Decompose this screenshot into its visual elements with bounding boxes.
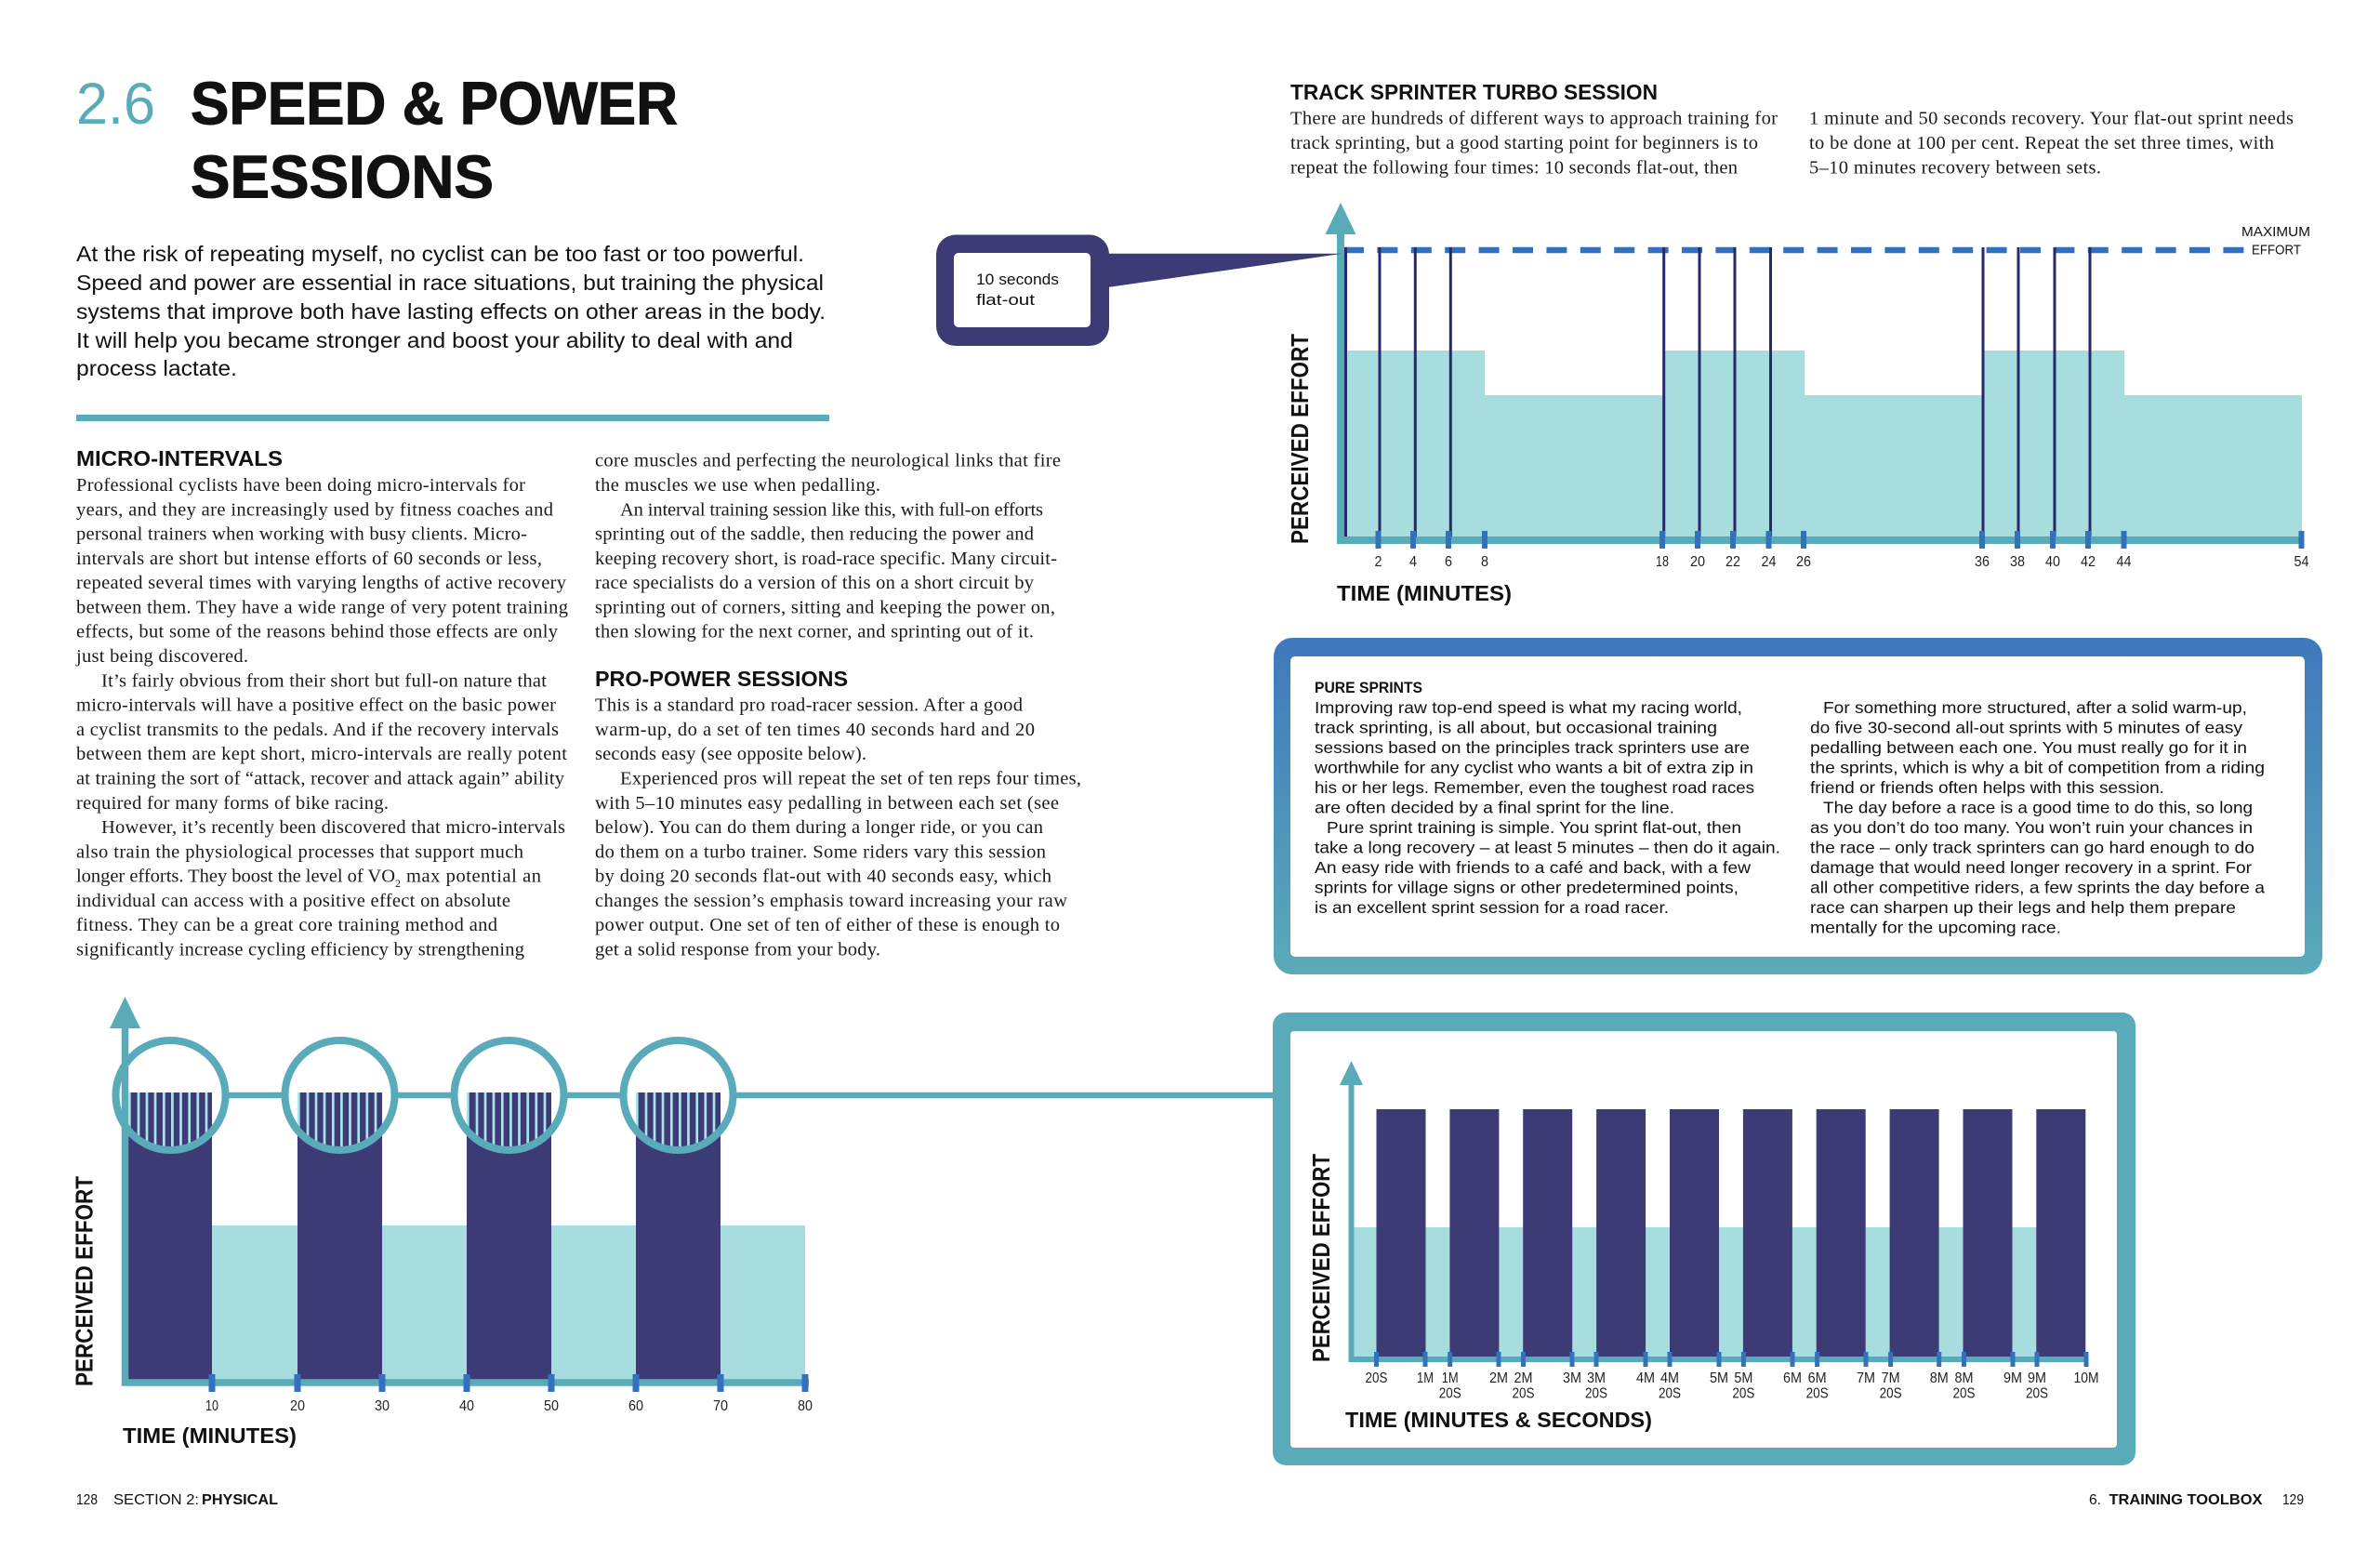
body copy: pro-power sessions: seconds easy (see opposite below). [595,744,866,764]
x axis title: TIME (MINUTES) [1337,581,1512,605]
body copy: track sprinter: repeat the following four times: 10 seconds flat-out, then [1290,158,1738,179]
text column: continued and pro-power sessions [595,451,1081,960]
body copy: micro-intervals: between them are kept short, micro-intervals are really potent [76,744,567,764]
x axis labels: 1M [1417,1370,1434,1386]
body copy: pro-power sessions: warm-up, do a set of ten times 40 seconds hard and 20 [595,720,1035,740]
body copy: micro-intervals: micro-intervals will have a positive effect on the basic power [76,695,556,716]
panel frame [1273,1013,2135,1465]
x axis labels: 9M [2028,1370,2046,1386]
body copy: micro-intervals: longer efforts. They boost the level of VO [76,867,395,887]
x axis labels: 3M [1563,1370,1581,1386]
x axis ticks [1376,1352,2086,1367]
body copy: micro-intervals: individual can access with a positive effect on absolute [76,891,510,911]
body copy: pure sprints left: sprints for village signs or other predetermined points, [1315,878,1739,896]
recovery blocks [212,1225,805,1380]
panel interior [1290,656,2305,957]
intro rule [76,415,829,421]
x axis labels: 44 [2116,554,2132,570]
y axis label: PERCEIVED EFFORT [71,1176,99,1386]
body copy: micro-intervals continued: core muscles and perfecting the neurological links that fire [595,451,1061,471]
x axis labels [1374,554,2309,570]
body copy: pure sprints right: friend or friends often helps with this session. [1810,778,2164,797]
callout inner panel [954,253,1091,327]
body copy: pro-power sessions: with 5–10 minutes easy pedalling in between each set (see [595,793,1059,814]
body copy: micro-intervals [75,475,568,960]
intro paragraph: It will help you became stronger and boost your ability to deal with and [76,328,793,352]
x axis labels: 20S [1806,1385,1829,1402]
body copy: micro-intervals: personal trainers when working with busy clients. Micro- [76,524,527,545]
body copy: track sprinter [1290,108,2294,179]
body copy: micro-intervals: just being discovered. [75,646,248,667]
x axis labels: 8M [1930,1370,1949,1386]
callout box [936,234,1109,346]
intro paragraph: process lactate. [76,356,237,380]
x axis labels: 20S [1732,1385,1754,1402]
x axis labels: 4 [1409,554,1417,570]
x axis labels: 36 [1975,554,1990,570]
magnified circle 2 [284,1040,394,1153]
body copy: pure sprints right: pedalling between each one. You must really go for it in [1810,738,2247,757]
chart: track sprinter turbo session [1286,203,2310,605]
body copy: pure sprints left: his or her legs. Remember, even the toughest road races [1315,778,1754,797]
body copy: micro-intervals: significantly increase cycling efficiency by strengthening [76,939,524,960]
body copy: pro-power sessions: do them on a turbo trainer. Some riders vary this session [595,841,1046,862]
footer left [76,1492,278,1508]
x axis labels: 26 [1796,554,1811,570]
footer right: 6. [2089,1492,2101,1508]
body copy: track sprinter: 1 minute and 50 seconds recovery. Your flat-out sprint needs [1809,108,2294,128]
x axis labels: 3M [1587,1370,1606,1386]
body copy: track sprinter: track sprinting, but a good starting point for beginners is to [1290,133,1758,153]
callout text: flat-out [976,291,1035,309]
x axis labels: 20S [2026,1385,2048,1402]
x axis labels: 4M [1660,1370,1679,1386]
body copy: micro-intervals: intervals are short but intense efforts of 60 seconds or less, [76,549,542,569]
x axis labels: 8 [1481,554,1488,570]
y axis arrow [1340,1061,1363,1085]
maximum effort label: EFFORT [2252,244,2301,258]
x axis labels: 22 [1726,554,1740,570]
panel interior [1290,1031,2117,1448]
body copy: micro-intervals: between them. They have a wide range of very potent training [76,597,568,617]
x axis labels: 20 [290,1398,305,1414]
text column: micro-intervals [75,446,568,960]
panel frame [1274,638,2322,974]
body copy: micro-intervals: years, and they are increasingly used by fitness coaches and [76,499,553,520]
body copy: track sprinter: There are hundreds of different ways to approach training for [1290,108,1778,128]
x axis labels: 42 [2081,554,2096,570]
body copy: pure sprints left: worthwhile for any cyclist who wants a bit of extra zip in [1314,759,1753,777]
body copy: micro-intervals: It’s fairly obvious from their short but full-on nature that [101,670,547,691]
heading: micro-intervals: MICRO-INTERVALS [76,446,283,470]
x axis labels: 30 [375,1398,390,1414]
x axis labels: 38 [2010,554,2025,570]
callout: 10 seconds flat-out [936,234,1342,346]
body copy: micro-intervals continued: race specialists do a version of this on a short circuit by [595,573,1035,593]
body copy: pure sprints left: An easy ride with friends to a café and back, with a few [1315,858,1751,877]
maximum effort label: MAXIMUM [2241,225,2310,240]
intro paragraph: systems that improve both have lasting effects on other areas in the body. [76,299,826,324]
recovery band [1354,1227,2037,1357]
title line 1: SPEED & POWER [191,69,678,138]
section number: 2.6 [76,72,155,137]
magnified circle 3 [454,1040,563,1153]
panel: pro-power chart [1273,1013,2135,1465]
body copy: micro-intervals: However, it’s recently been discovered that micro-intervals [101,817,565,838]
x axis labels: 80 [798,1398,813,1414]
chart: micro-intervals effort over time [71,997,1276,1448]
body copy: micro-intervals continued: sprinting out of corners, sitting and keeping the power on, [595,597,1055,617]
body copy: pro-power sessions: changes the session’s emphasis toward increasing your raw [595,891,1067,911]
x axis labels: 2 [1374,554,1382,570]
body copy: pure sprints left: are often decided by a final sprint for the line. [1315,798,1674,816]
connector line to pro-power chart [229,1092,1276,1098]
intro paragraph [76,242,826,380]
axes [125,1027,809,1383]
x axis labels: 7M [1882,1370,1900,1386]
footer left: SECTION 2: [113,1492,199,1508]
body copy: pure sprints right: race can sharpen up their legs and help them prepare [1810,898,2236,917]
body copy: micro-intervals: effects, but some of the reasons behind those effects are only [76,622,559,642]
effort bars [1376,1109,2085,1357]
body copy: pro-power sessions [595,695,1081,960]
effort bars [128,1092,721,1380]
x axis labels: 6 [1445,554,1452,570]
maximum effort label [2241,225,2310,258]
x axis labels: 5M [1710,1370,1728,1386]
axes [1352,1083,2086,1359]
body copy: track sprinter: 5–10 minutes recovery between sets. [1809,158,2101,179]
callout text: 10 seconds [976,271,1059,288]
body copy: micro-intervals: required for many forms of bike racing. [76,793,389,814]
body copy: micro-intervals: a cyclist transmits to the pedals. And if the recovery intervals [76,720,559,740]
x axis labels: 20 [1690,554,1705,570]
body copy: pure sprints right: The day before a race is a good time to do this, so long [1823,798,2253,816]
body copy: pure sprints left: Improving raw top-end speed is what my racing world, [1315,698,1742,717]
body copy: pure sprints right: damage that would need longer recovery in a sprint. For [1810,858,2252,877]
footer right [2089,1492,2304,1508]
body copy: micro-intervals: also train the physiological processes that support much [76,841,523,862]
body copy: micro-intervals continued [595,451,1061,642]
x axis labels: 5M [1734,1370,1752,1386]
footer left: PHYSICAL [202,1492,278,1508]
footer right: TRAINING TOOLBOX [2109,1492,2263,1508]
magnified circle 4 [623,1040,733,1153]
body copy: micro-intervals: max potential an [406,867,541,887]
x axis labels: 20S [1880,1385,1902,1402]
body copy: micro-intervals: repeated several times with varying lengths of active recovery [76,573,567,593]
x axis labels: 7M [1857,1370,1875,1386]
body copy: micro-intervals continued: the muscles we use when pedalling. [595,475,880,496]
x axis labels: 20S [1952,1385,1975,1402]
x axis labels: 24 [1761,554,1777,570]
body copy: pure sprints right: the race – only track sprinters can go hard enough to do [1810,839,2254,857]
footer left: 128 [76,1492,98,1508]
body copy: track sprinter: to be done at 100 per cent. Repeat the set three times, with [1809,133,2274,153]
x axis labels: 70 [713,1398,728,1414]
y axis arrow [1326,203,1355,234]
body copy: pure sprints left: track sprinting, is all about, but occasional training [1315,718,1717,736]
body copy: pro-power sessions: below). You can do them during a longer ride, or you can [595,817,1043,838]
recovery blocks [1485,395,2302,536]
x axis labels: 20S [1659,1385,1681,1402]
body copy: micro-intervals: 2 [395,877,401,890]
x axis labels: 9M [2003,1370,2022,1386]
body copy: pure sprints left: take a long recovery – at least 5 minutes – then do it again. [1315,839,1780,857]
x axis labels: 1M [1442,1370,1459,1386]
x axis labels: 2M [1489,1370,1508,1386]
body copy: pure sprints left: Pure sprint training is simple. You sprint flat-out, then [1327,818,1741,837]
body copy: micro-intervals: at training the sort of “attack, recover and attack again” ability [76,768,565,788]
body copy: pure sprints right [1810,698,2265,937]
body copy: pure sprints right: the sprints, which is why a bit of competition from a riding [1810,759,2265,777]
footer right: 129 [2282,1492,2304,1508]
body copy: pure sprints left: is an excellent sprint session for a road racer. [1315,898,1669,917]
x axis labels: 10M [2073,1370,2099,1386]
sprint lines [1346,247,2090,536]
x axis labels: 6M [1808,1370,1827,1386]
title [76,69,678,210]
x axis labels: 60 [628,1398,643,1414]
text block: track sprinter turbo session [1290,80,2294,179]
x axis labels: 20S [1439,1385,1461,1402]
x axis labels: 18 [1656,554,1669,570]
x axis labels: 40 [459,1398,474,1414]
magnified circle 1 [115,1040,225,1153]
x axis labels: 54 [2294,554,2309,570]
body copy: pure sprints right: mentally for the upcoming race. [1810,919,2061,937]
body copy: pro-power sessions: This is a standard pro road-racer session. After a good [595,695,1023,716]
x axis ticks [1378,531,2302,549]
body copy: pro-power sessions: Experienced pros will repeat the set of ten reps four times, [620,768,1081,788]
callout pointer [1104,254,1342,288]
body copy: micro-intervals continued: keeping recovery short, is road-race specific. Many circuit- [595,549,1057,569]
x axis labels: 2M [1514,1370,1532,1386]
y axis label: PERCEIVED EFFORT [1307,1154,1335,1362]
body copy: micro-intervals continued: An interval training session like this, with full-on efforts [620,499,1043,520]
x axis labels [205,1398,813,1414]
x axis labels: 10 [205,1398,218,1414]
body copy: pure sprints left [1314,698,1780,917]
x axis labels: 20S [1365,1370,1387,1386]
x axis labels: 40 [2045,554,2060,570]
y axis arrow [110,997,140,1028]
x axis labels [1365,1370,2099,1402]
body copy: pure sprints right: as you don’t do too many. You won’t ruin your chances in [1810,818,2253,837]
body copy: pro-power sessions: get a solid response from your body. [595,939,880,960]
x axis title: TIME (MINUTES & SECONDS) [1345,1408,1652,1432]
body copy: pure sprints right: For something more structured, after a solid warm-up, [1823,698,2247,717]
x axis labels: 4M [1636,1370,1655,1386]
panel: pure sprints [1274,638,2322,974]
axes [1341,232,2302,540]
y axis label: PERCEIVED EFFORT [1286,334,1314,544]
body copy: micro-intervals: fitness. They can be a great core training method and [76,915,497,935]
body copy: micro-intervals continued: sprinting out of the saddle, then reducing the power and [595,524,1034,545]
heading: pure sprints: PURE SPRINTS [1315,680,1422,696]
heading: pro-power sessions: PRO-POWER SESSIONS [595,667,848,691]
body copy: pro-power sessions: power output. One set of ten of either of these is enough to [595,915,1060,935]
callout text [976,271,1059,309]
x axis labels: 6M [1783,1370,1802,1386]
maximum effort dashed line [1343,247,2244,253]
intro paragraph: Speed and power are essential in race situations, but training the physical [76,271,824,295]
body copy: pro-power sessions: by doing 20 seconds flat-out with 40 seconds easy, which [595,867,1051,887]
high effort blocks [1344,351,2124,536]
title line 2: SESSIONS [191,143,494,210]
x axis ticks [212,1374,805,1392]
x axis labels: 50 [544,1398,559,1414]
x axis title: TIME (MINUTES) [123,1423,297,1448]
x axis labels: 8M [1954,1370,1973,1386]
intro paragraph: At the risk of repeating myself, no cyclist can be too fast or too powerful. [76,242,804,266]
body copy: micro-intervals continued: then slowing for the next corner, and sprinting out of it. [595,622,1034,642]
body copy: pure sprints left: sessions based on the principles track sprinters use are [1315,738,1750,757]
body copy: pure sprints right: all other competitive riders, a few sprints the day before a [1810,878,2265,896]
body copy: pure sprints right: do five 30-second all-out sprints with 5 minutes of easy [1810,718,2242,736]
x axis labels: 20S [1512,1385,1534,1402]
body copy: micro-intervals: Professional cyclists have been doing micro-intervals for [76,475,525,496]
heading: track sprinter turbo session: TRACK SPRINTER TURBO SESSION [1290,80,1658,104]
x axis labels: 20S [1585,1385,1607,1402]
